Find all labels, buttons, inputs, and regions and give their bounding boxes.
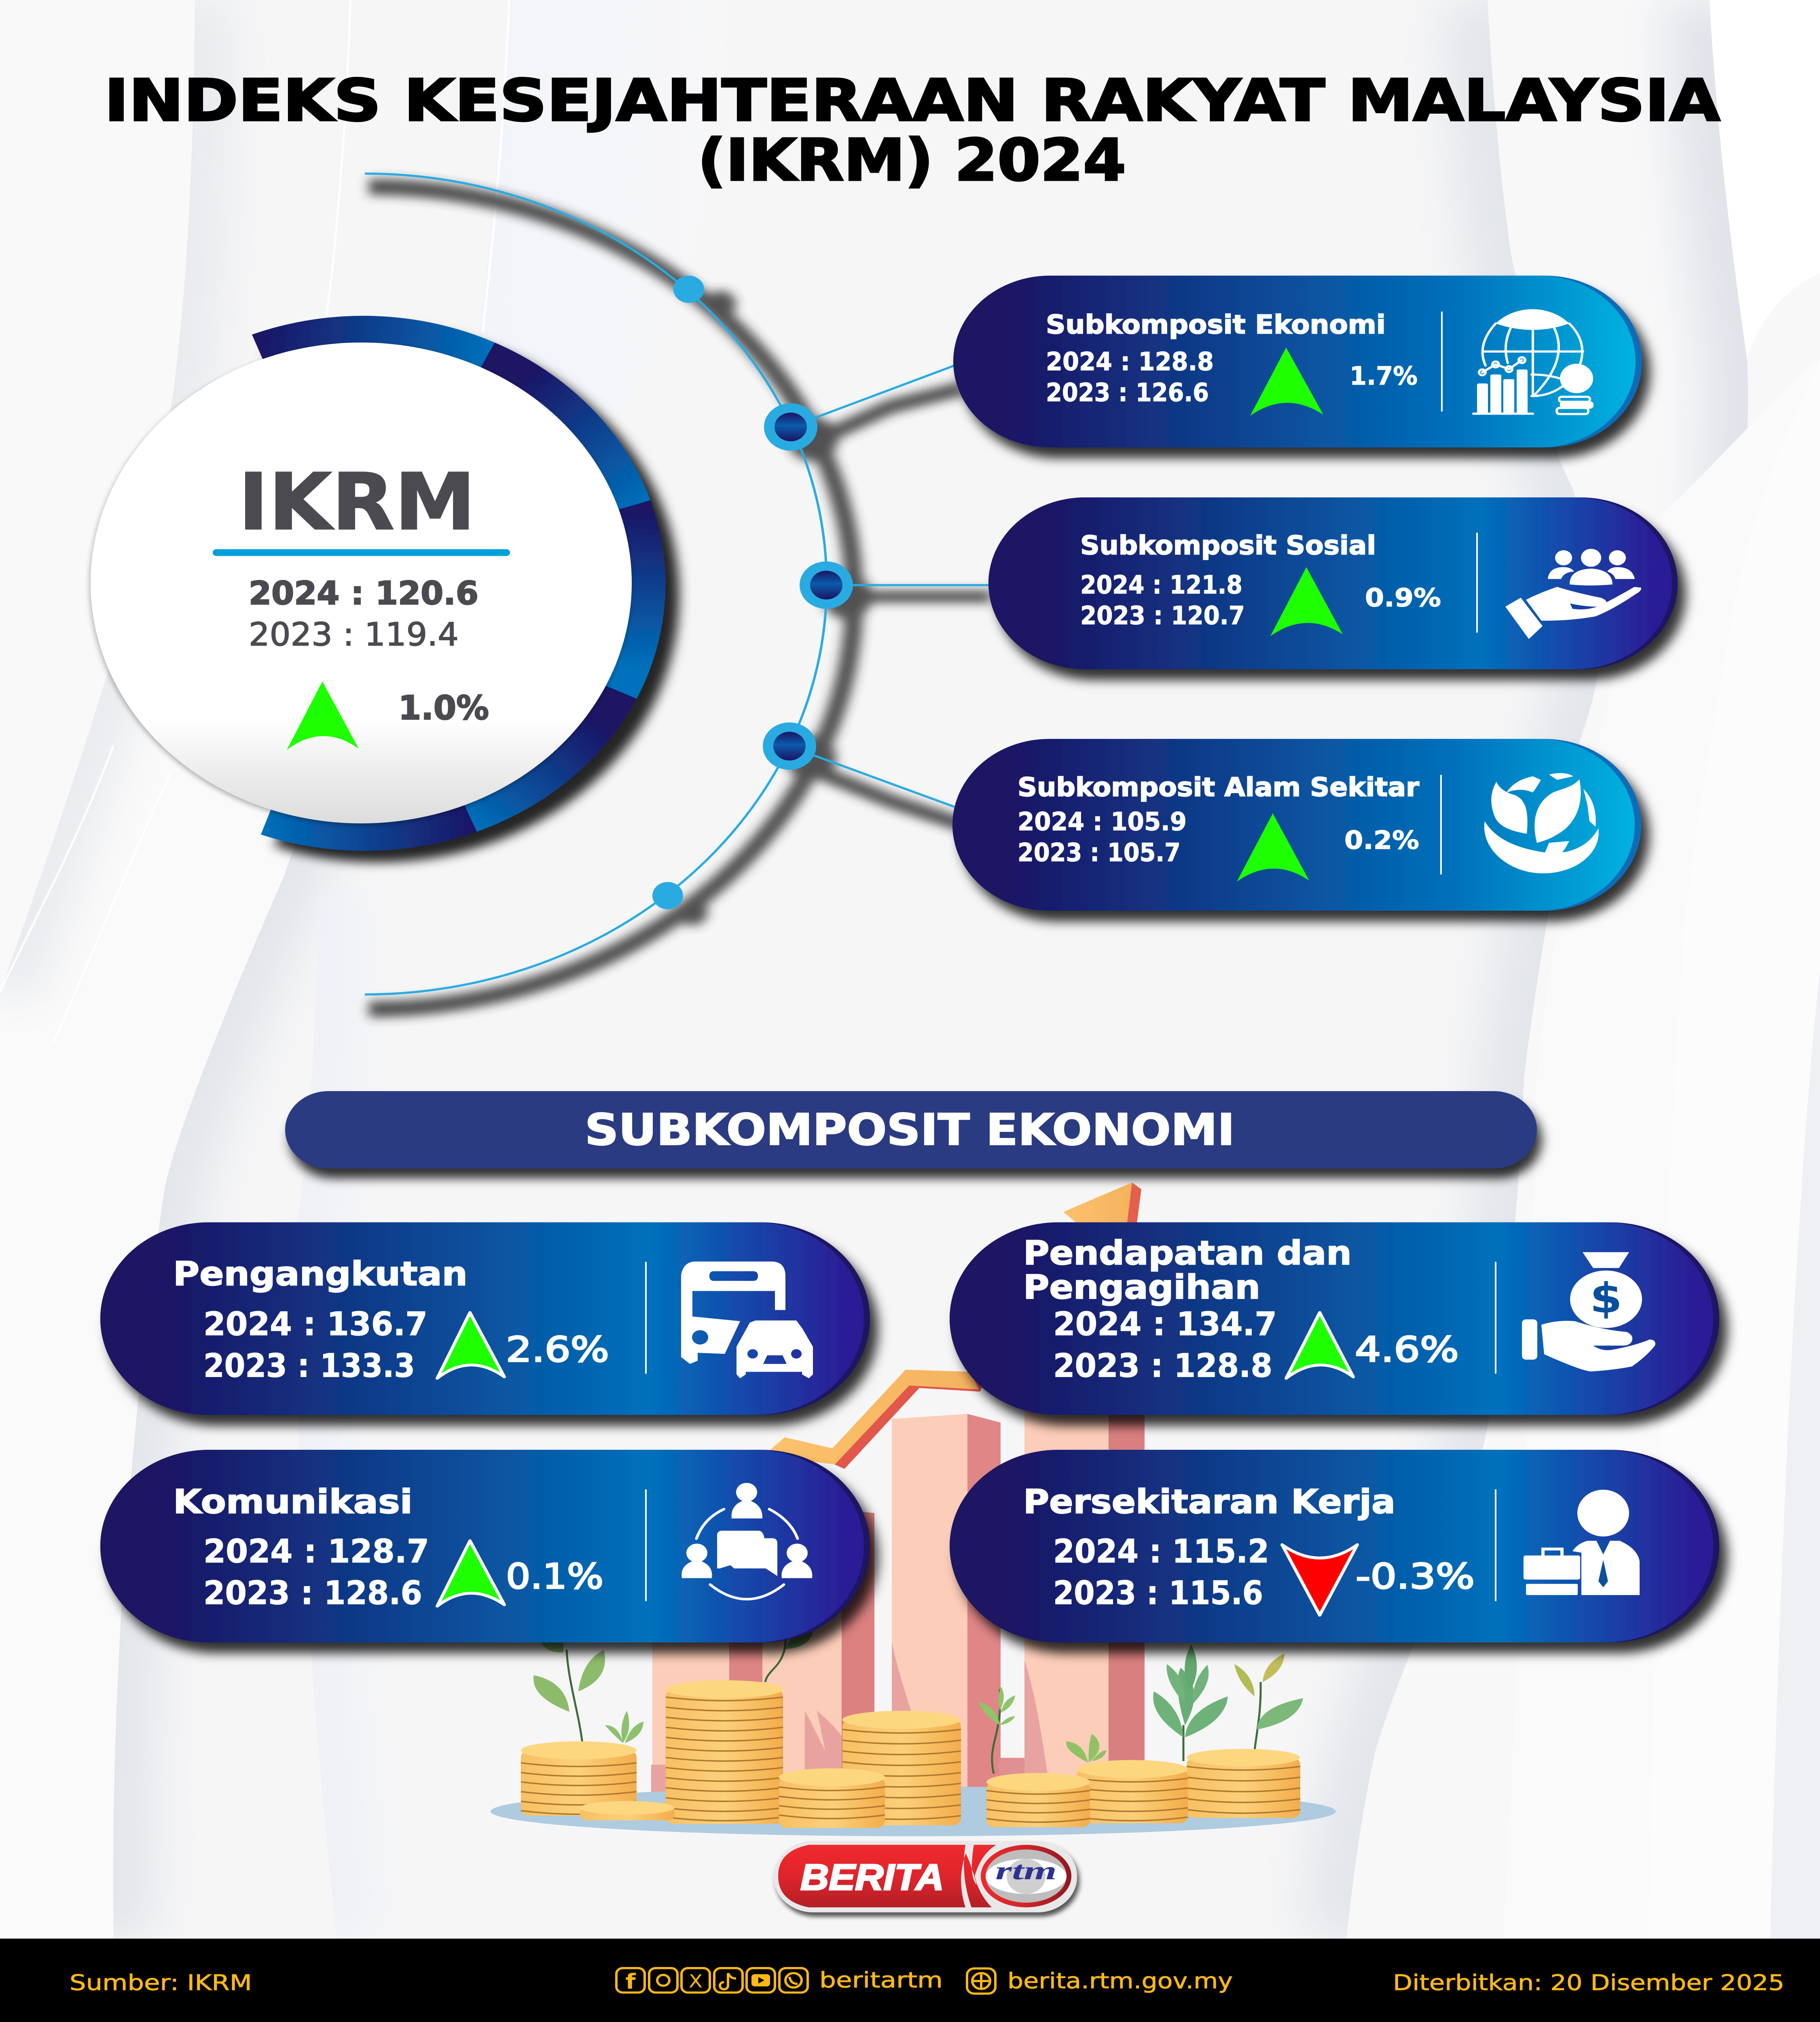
values: 2023 : 128.6 xyxy=(203,1574,422,1612)
underline xyxy=(213,549,510,556)
red body xyxy=(778,1845,996,1907)
icon: hand holding money bag xyxy=(1522,1252,1655,1371)
title: Subkomposit Alam Sekitar xyxy=(1018,772,1419,802)
values xyxy=(1018,807,1187,867)
values: 2023 : 105.7 xyxy=(1018,838,1181,867)
title: Subkomposit Sosial xyxy=(1080,530,1376,560)
panel: Subkomposit Alam Sekitar xyxy=(952,739,1641,911)
platform ellipse xyxy=(491,1787,1336,1836)
single coin xyxy=(580,1801,675,1820)
percent: 0.9% xyxy=(1365,583,1441,612)
icon: hand holding people xyxy=(1505,549,1641,639)
coin stack B xyxy=(666,1680,783,1824)
divider xyxy=(1476,533,1478,632)
social media icons: X xyxy=(689,1971,703,1992)
illustration: pink bar chart xyxy=(651,1312,1145,1797)
website text: berita.rtm.gov.my xyxy=(1007,1969,1233,1994)
pill xyxy=(953,276,1642,447)
up arrow xyxy=(1286,1313,1353,1378)
values: 2024 : 121.8 xyxy=(1080,570,1242,599)
logo base xyxy=(774,1841,1077,1912)
values: 2024 : 128.7 xyxy=(203,1533,429,1570)
coin stack C xyxy=(842,1711,961,1825)
node markers on arc xyxy=(652,276,853,909)
title xyxy=(1023,1234,1352,1307)
title: Pengagihan xyxy=(1023,1268,1260,1307)
values xyxy=(203,1305,427,1385)
chart: shadow of the connector arc xyxy=(369,187,991,1009)
title: Subkomposit Ekonomi xyxy=(1046,309,1386,340)
values: 2024 : 134.7 xyxy=(1053,1305,1277,1343)
up arrow xyxy=(437,1313,504,1378)
published date: Diterbitkan: 20 Disember 2025 xyxy=(1393,1970,1784,1995)
percent: 0.1% xyxy=(506,1556,603,1597)
title: Pengangkutan xyxy=(173,1255,468,1293)
plants behind coins xyxy=(533,1632,1303,1774)
panel: Subkomposit Sosial xyxy=(988,497,1678,669)
values xyxy=(1080,570,1245,630)
up arrow xyxy=(287,681,359,750)
coin stack F xyxy=(1077,1760,1188,1823)
source text: Sumber: IKRM xyxy=(70,1970,252,1995)
values: 2023 : 133.3 xyxy=(203,1347,415,1385)
values xyxy=(1053,1305,1277,1385)
icon: businessman with briefcase xyxy=(1524,1490,1640,1595)
illustration: coin stacks on platform xyxy=(491,1632,1336,1836)
heading banner: Subkomposit Ekonomi: SUBKOMPOSIT EKONOMI xyxy=(585,1105,1235,1155)
panel: Persekitaran Kerja xyxy=(950,1450,1719,1643)
values: 2024 : 128.8 xyxy=(1046,347,1214,376)
coin stack E xyxy=(986,1773,1090,1827)
panel: Pengangkutan xyxy=(100,1223,870,1415)
values: 2024 : 105.9 xyxy=(1018,807,1187,836)
values xyxy=(203,1533,429,1612)
connector arc and lines xyxy=(365,173,991,994)
rtm wordmark: rtm xyxy=(995,1856,1057,1885)
values: 2023 : 128.8 xyxy=(1053,1347,1272,1385)
divider xyxy=(645,1262,647,1374)
percent: 2.6% xyxy=(506,1329,609,1370)
pill xyxy=(952,739,1641,911)
title: Persekitaran Kerja xyxy=(1023,1483,1395,1521)
icon: hand holding money bag: $ xyxy=(1590,1274,1622,1323)
icon: earth and leaves xyxy=(1484,773,1599,874)
coin stack D xyxy=(779,1768,885,1828)
percent: -0.3% xyxy=(1356,1556,1475,1597)
panel: Pendapatan dan Pengagihan xyxy=(950,1223,1719,1415)
values: 2023 : 120.7 xyxy=(1080,601,1245,630)
panel: Subkomposit Ekonomi xyxy=(953,276,1642,447)
social media icons xyxy=(616,1968,808,1994)
footer bar xyxy=(0,1939,1820,2022)
change percent: 1.0% xyxy=(398,689,489,727)
up arrow xyxy=(1270,567,1343,636)
coin stack A xyxy=(521,1741,637,1816)
panel: IKRM main circle xyxy=(91,316,665,851)
title: INDEKS KESEJAHTERAAN RAKYAT MALAYSIA xyxy=(104,67,1720,134)
values: 2023 : 115.6 xyxy=(1053,1574,1263,1612)
icon: website globe xyxy=(967,1969,995,1994)
divider xyxy=(1495,1489,1496,1601)
title xyxy=(104,67,1720,194)
panel: Komunikasi xyxy=(100,1450,870,1643)
title: Komunikasi xyxy=(173,1483,413,1521)
social media icons: f xyxy=(625,1969,636,1994)
divider xyxy=(1440,775,1442,874)
percent: 4.6% xyxy=(1355,1329,1459,1370)
values: 2024 : 136.7 xyxy=(203,1305,427,1343)
up arrow xyxy=(1250,347,1323,416)
logo: Berita RTM xyxy=(774,1841,1077,1912)
icon: globe with bar chart and books xyxy=(1472,309,1594,415)
values: 2023 : 126.6 xyxy=(1046,378,1209,407)
handle text: beritartm xyxy=(819,1968,943,1993)
values xyxy=(1046,347,1214,407)
BERITA wordmark: BERITA xyxy=(800,1857,944,1897)
value 2024: 2024 : 120.6 xyxy=(249,574,478,612)
values xyxy=(1053,1533,1269,1612)
percent: 0.2% xyxy=(1344,825,1419,855)
values: 2024 : 115.2 xyxy=(1053,1533,1269,1570)
divider xyxy=(1441,312,1443,412)
white circle xyxy=(91,343,632,823)
white swoosh xyxy=(961,1845,977,1907)
percent: 1.7% xyxy=(1350,361,1418,391)
icon: rising orange trend arrow xyxy=(764,1182,1141,1469)
up arrow xyxy=(1237,813,1309,882)
circle emblem xyxy=(981,1845,1071,1907)
up arrow xyxy=(437,1541,504,1606)
coin stack G xyxy=(1187,1749,1300,1818)
divider xyxy=(1495,1262,1496,1374)
title: (IKRM) 2024 xyxy=(698,127,1126,194)
pill xyxy=(950,1223,1719,1415)
down arrow xyxy=(1282,1545,1357,1615)
pill xyxy=(950,1450,1719,1643)
pill xyxy=(100,1450,870,1643)
pill xyxy=(100,1223,870,1415)
icon: bus and car xyxy=(681,1261,813,1378)
value 2023: 2023 : 119.4 xyxy=(249,615,459,653)
icon: people in discussion xyxy=(681,1483,812,1599)
heading IKRM: IKRM xyxy=(238,457,476,548)
heading banner: Subkomposit Ekonomi xyxy=(285,1091,1537,1168)
pill xyxy=(988,497,1678,669)
segmented blue ring xyxy=(252,316,665,851)
title: Pendapatan dan xyxy=(1023,1234,1352,1272)
divider xyxy=(645,1489,647,1601)
